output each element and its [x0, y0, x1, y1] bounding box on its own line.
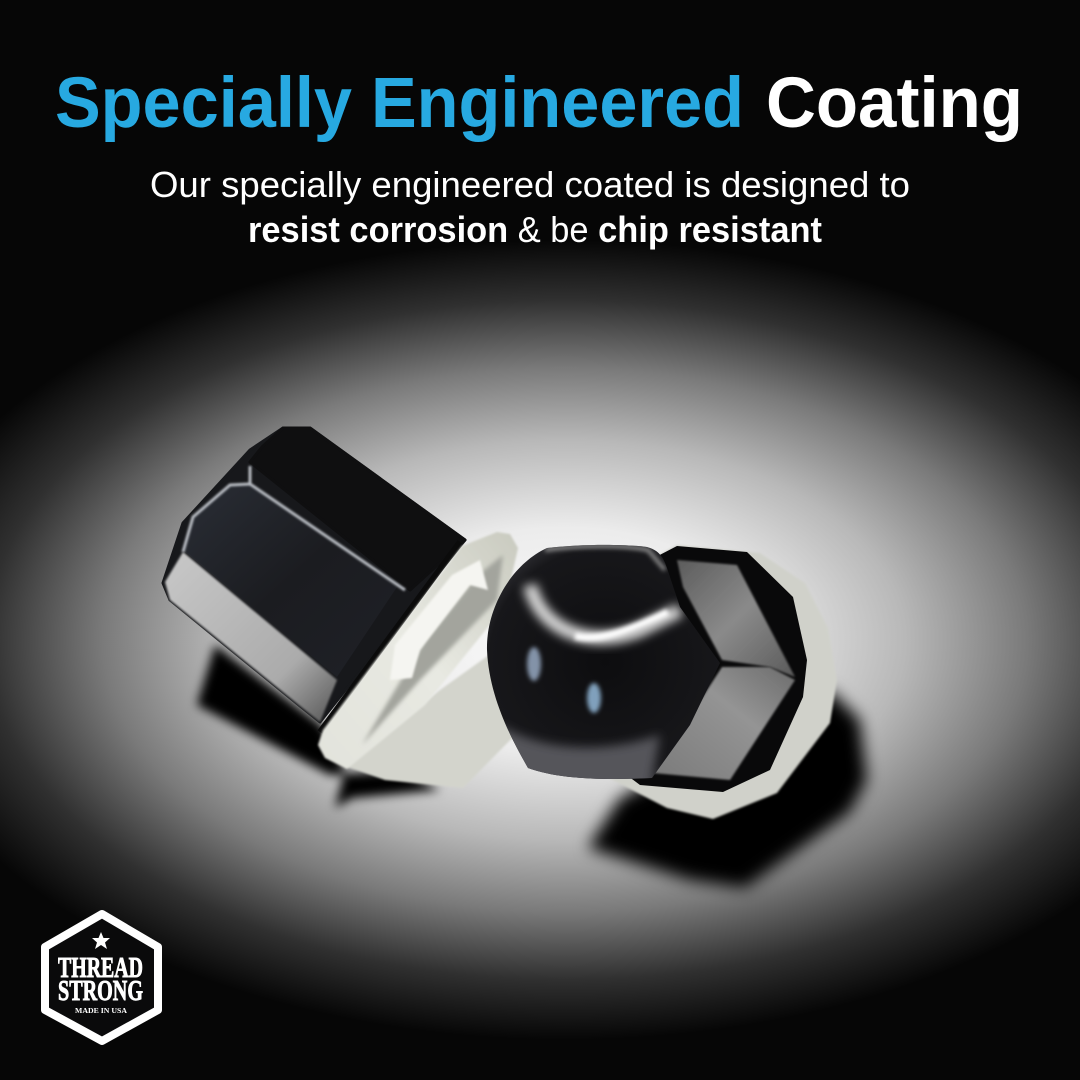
drop shadows	[197, 645, 867, 888]
washer	[603, 545, 837, 819]
right lug nut	[480, 540, 837, 819]
subtitle line two: resist corrosion & be chip resistant	[248, 209, 822, 250]
logo word two: STRONG	[58, 975, 143, 1007]
dome lower band	[506, 724, 664, 779]
left lug nut	[163, 428, 525, 788]
flange inner recess	[362, 555, 503, 745]
dome	[486, 544, 720, 779]
flange	[318, 532, 518, 769]
top face	[250, 428, 465, 590]
dome top rim	[545, 546, 665, 570]
dome specular arc	[530, 585, 680, 638]
title: Specially Engineered	[55, 64, 744, 143]
upper hex facet	[677, 560, 795, 677]
face highlights	[183, 466, 405, 590]
front face	[183, 484, 397, 677]
logo hexagon	[45, 914, 158, 1041]
lower hex facet	[653, 667, 795, 780]
nut thread cone	[345, 640, 525, 788]
flange raised strip	[390, 560, 488, 680]
subtitle	[150, 164, 910, 250]
flange dark seam	[320, 542, 460, 732]
subtitle line one: Our specially engineered coated is designed to	[150, 164, 910, 205]
logo word one: THREAD	[58, 952, 143, 984]
lower reflective face	[165, 552, 337, 722]
black inner well	[620, 546, 807, 792]
logo tagline: MADE IN USA	[75, 1006, 128, 1015]
dome blue reflections	[527, 647, 541, 681]
logo star	[92, 932, 110, 949]
title white word: Coating	[766, 64, 1023, 143]
nut body	[163, 428, 465, 722]
logo: Thread Strong badge	[45, 914, 158, 1041]
